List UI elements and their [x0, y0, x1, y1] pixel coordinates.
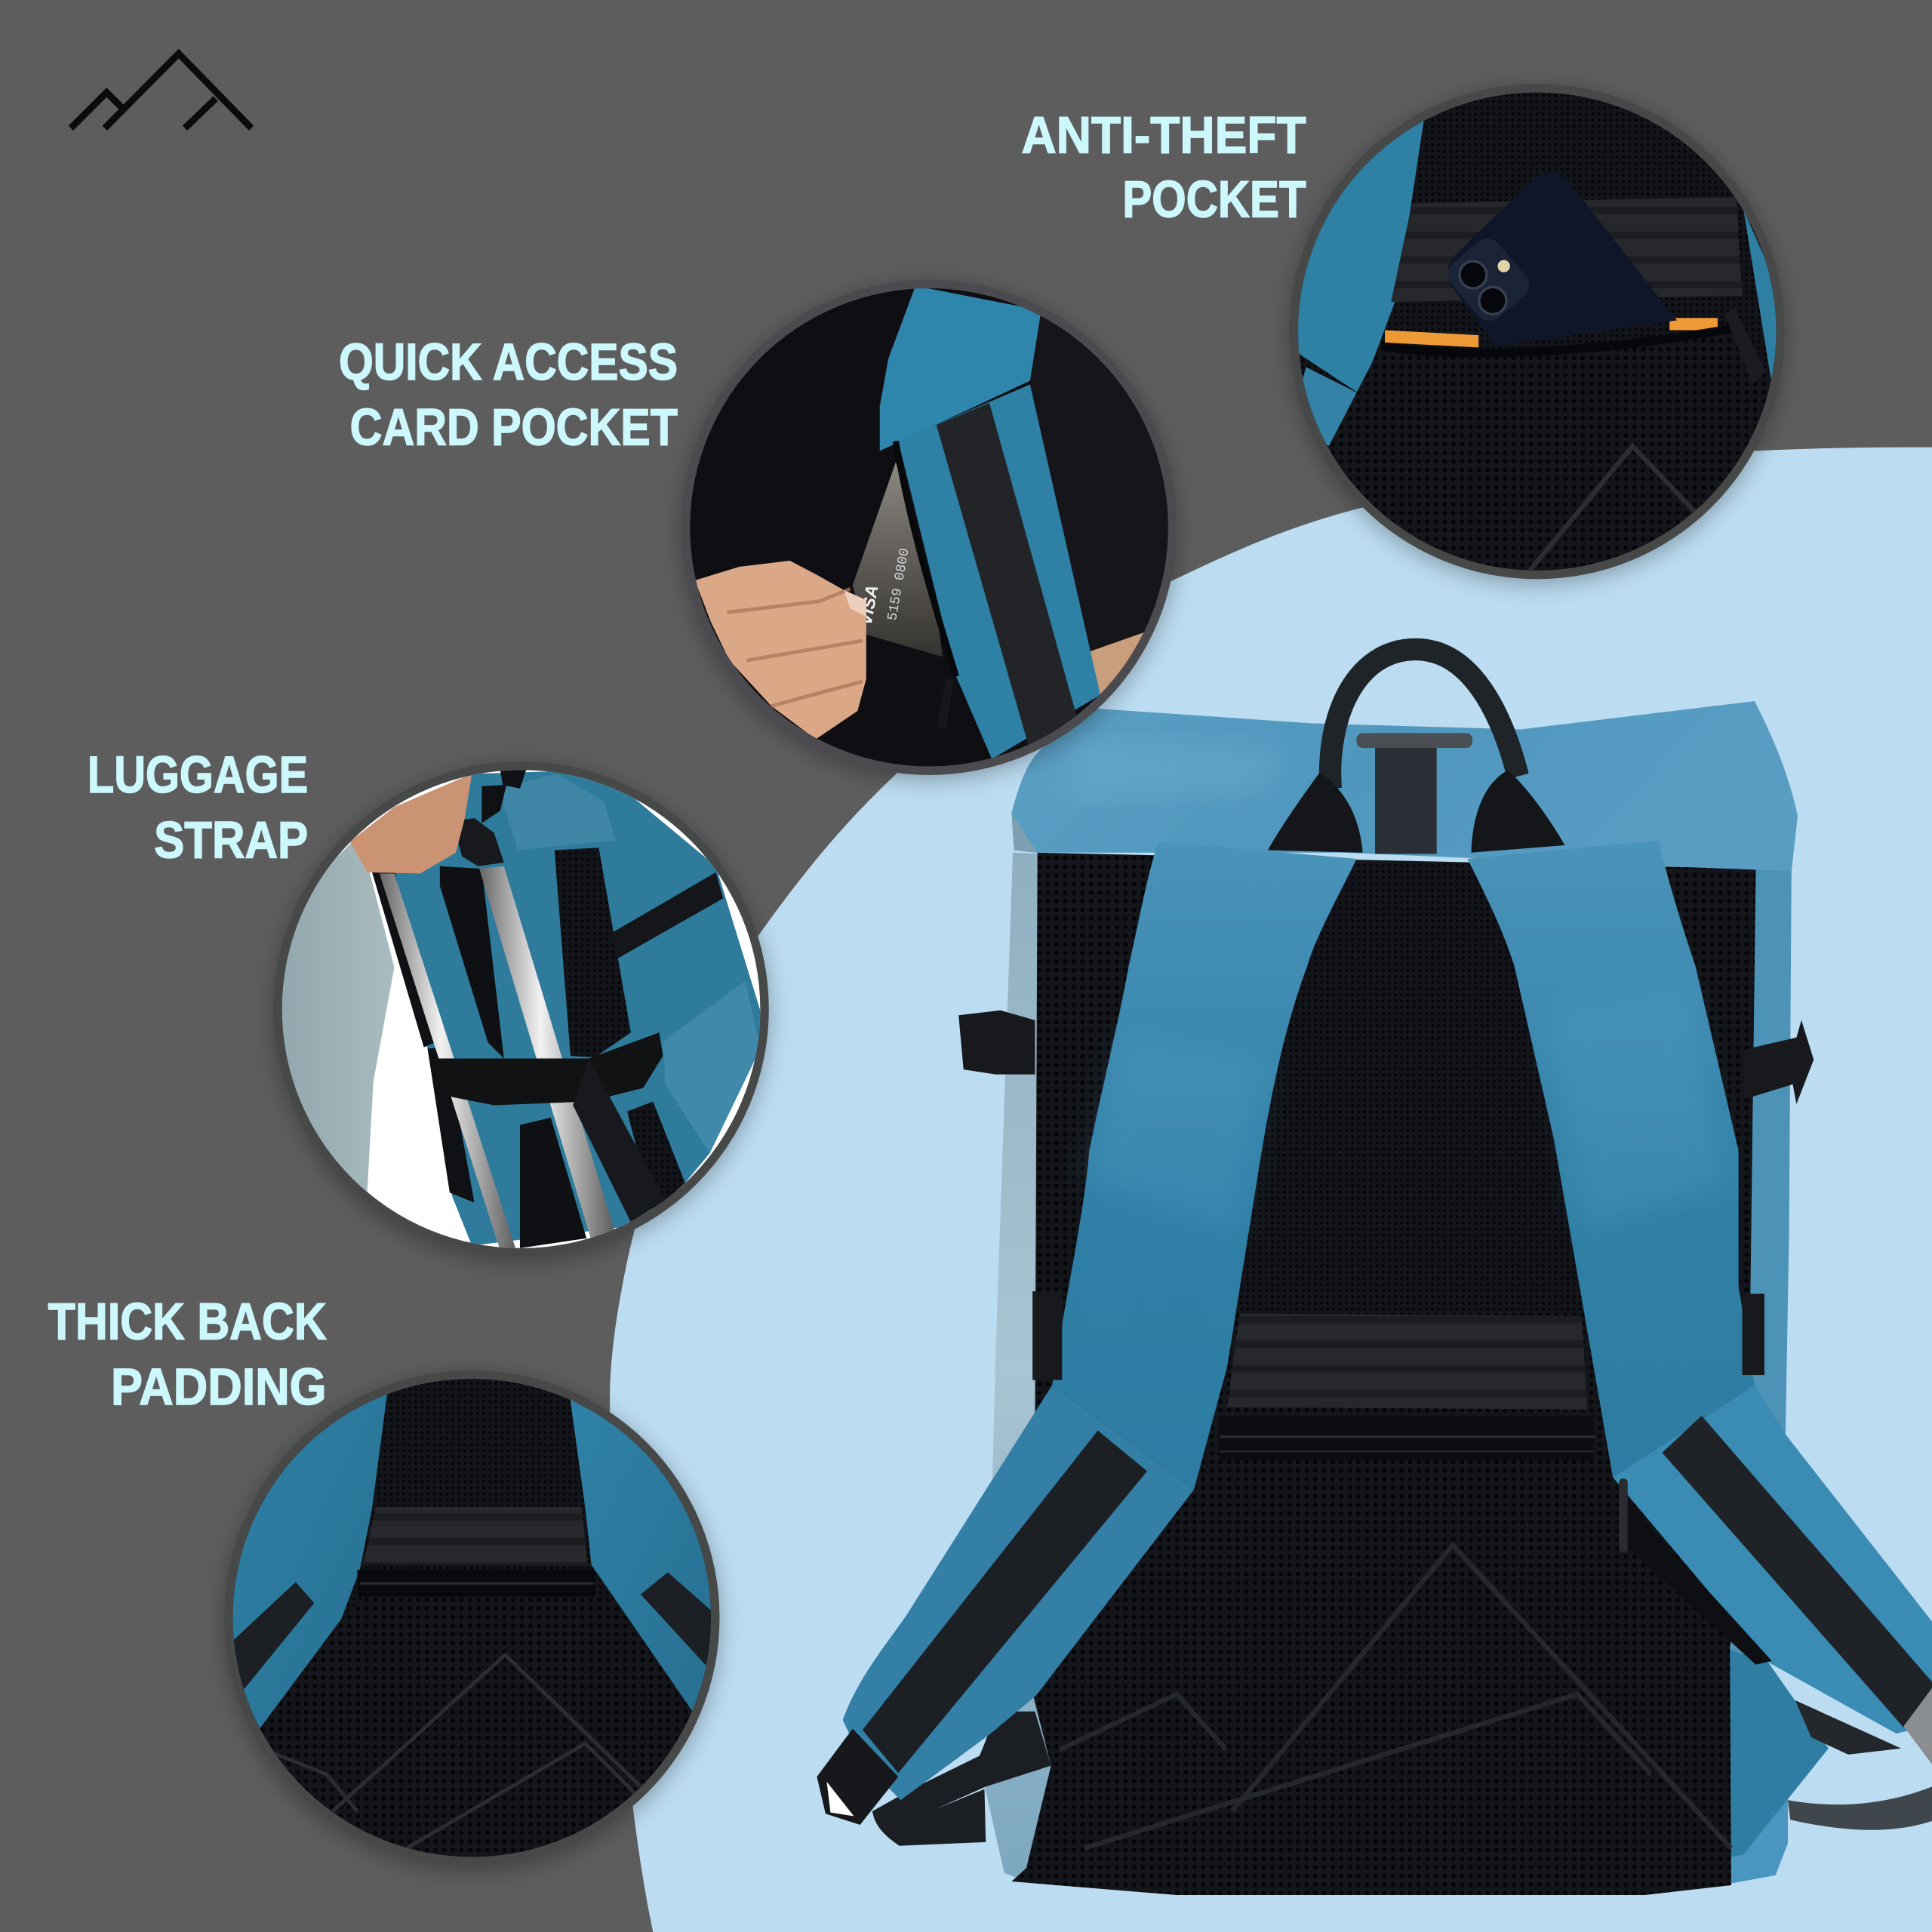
- credit card: [853, 462, 943, 657]
- right shoulder strap: [1467, 840, 1932, 1764]
- main backpack photo illustration: [817, 649, 1932, 1895]
- backpack blue body: [372, 771, 760, 1246]
- credit card: VISA: [856, 583, 881, 626]
- light blue curved background shape: [610, 448, 1932, 1932]
- t-shirt sleeve: [1030, 308, 1183, 653]
- heading: quick access card pocket: QUICK ACCESS: [339, 333, 678, 391]
- trolley handle bars: [380, 874, 516, 1251]
- heading: anti-theft pocket: [1021, 106, 1306, 228]
- strap webbing: [937, 403, 1077, 746]
- strap lower: [898, 384, 1100, 759]
- zipper line: [1381, 329, 1730, 353]
- flap top: [1011, 701, 1798, 871]
- zipper: [896, 441, 956, 676]
- zipper puller: [1619, 1478, 1628, 1552]
- horizontal webbing and zipper: [1227, 1313, 1587, 1410]
- jeans: [271, 843, 394, 1192]
- bag side panels: [984, 853, 1232, 1885]
- hand: [350, 774, 472, 874]
- pad seams: [265, 1655, 641, 1848]
- teal strap left: [1298, 121, 1423, 392]
- heading: luggage strap: [88, 746, 308, 869]
- strap upper: [880, 286, 1041, 451]
- circle: anti-theft pocket detail: [1281, 74, 1799, 592]
- heading: luggage strap: LUGGAGE: [88, 746, 308, 804]
- heading: quick access card pocket: [339, 333, 678, 456]
- black left side panel: [372, 871, 438, 1048]
- zipper: [357, 1570, 594, 1597]
- heading: thick back padding: [48, 1293, 327, 1416]
- arm skin: [1085, 631, 1149, 703]
- trolley grip: [452, 818, 504, 866]
- heading: thick back padding: PADDING: [111, 1358, 327, 1416]
- circle ring: [273, 761, 769, 1257]
- lower right pocket: [1721, 1650, 1829, 1885]
- circle: thick back padding detail: [222, 1367, 727, 1873]
- central webbing: [364, 1507, 588, 1566]
- lower mesh pocket: [1306, 327, 1774, 579]
- teal strap right: [1743, 211, 1777, 380]
- circle: luggage strap detail: [271, 758, 777, 1263]
- lower pad mesh: [259, 1597, 693, 1873]
- smartphone: [1442, 173, 1677, 346]
- logo: mountain outline: [71, 54, 251, 128]
- left shoulder strap: [817, 841, 1357, 1825]
- top handle: [1268, 649, 1564, 854]
- pad seam: [1527, 446, 1694, 573]
- heading: quick access card pocket: CARD POCKET: [350, 398, 678, 456]
- circle ring: [1290, 84, 1785, 579]
- luggage belt: [430, 1032, 666, 1223]
- upper straps: [481, 770, 526, 823]
- heading: luggage strap: STRAP: [154, 811, 308, 869]
- side strap: [610, 872, 723, 958]
- rear straps at bottom: [872, 1700, 1932, 1846]
- heading: anti-theft pocket: POCKET: [1122, 170, 1306, 228]
- orange inner lining: [1385, 331, 1478, 347]
- left webbing: [222, 1582, 314, 1689]
- right webbing: [641, 1572, 721, 1671]
- left teal strap: [222, 1386, 388, 1730]
- heading: anti-theft pocket: ANTI-THEFT: [1021, 106, 1306, 164]
- back pad chevron seams: [1060, 1545, 1731, 1848]
- back mesh panel: [1011, 853, 1756, 1895]
- side compression buckles: [958, 1011, 1814, 1380]
- right teal strap: [569, 1392, 727, 1712]
- circle: quick access card pocket detail: [678, 276, 1183, 781]
- webbing: [1391, 197, 1743, 302]
- heading: thick back padding: THICK BACK: [48, 1293, 327, 1351]
- left strap buckle: [817, 1729, 898, 1825]
- lower side pocket: [663, 981, 760, 1153]
- black back panels: [555, 848, 631, 1057]
- hand: [695, 561, 866, 740]
- circle ring: [681, 280, 1177, 775]
- circle ring: [224, 1371, 719, 1866]
- credit card: 5159 0800: [885, 547, 913, 622]
